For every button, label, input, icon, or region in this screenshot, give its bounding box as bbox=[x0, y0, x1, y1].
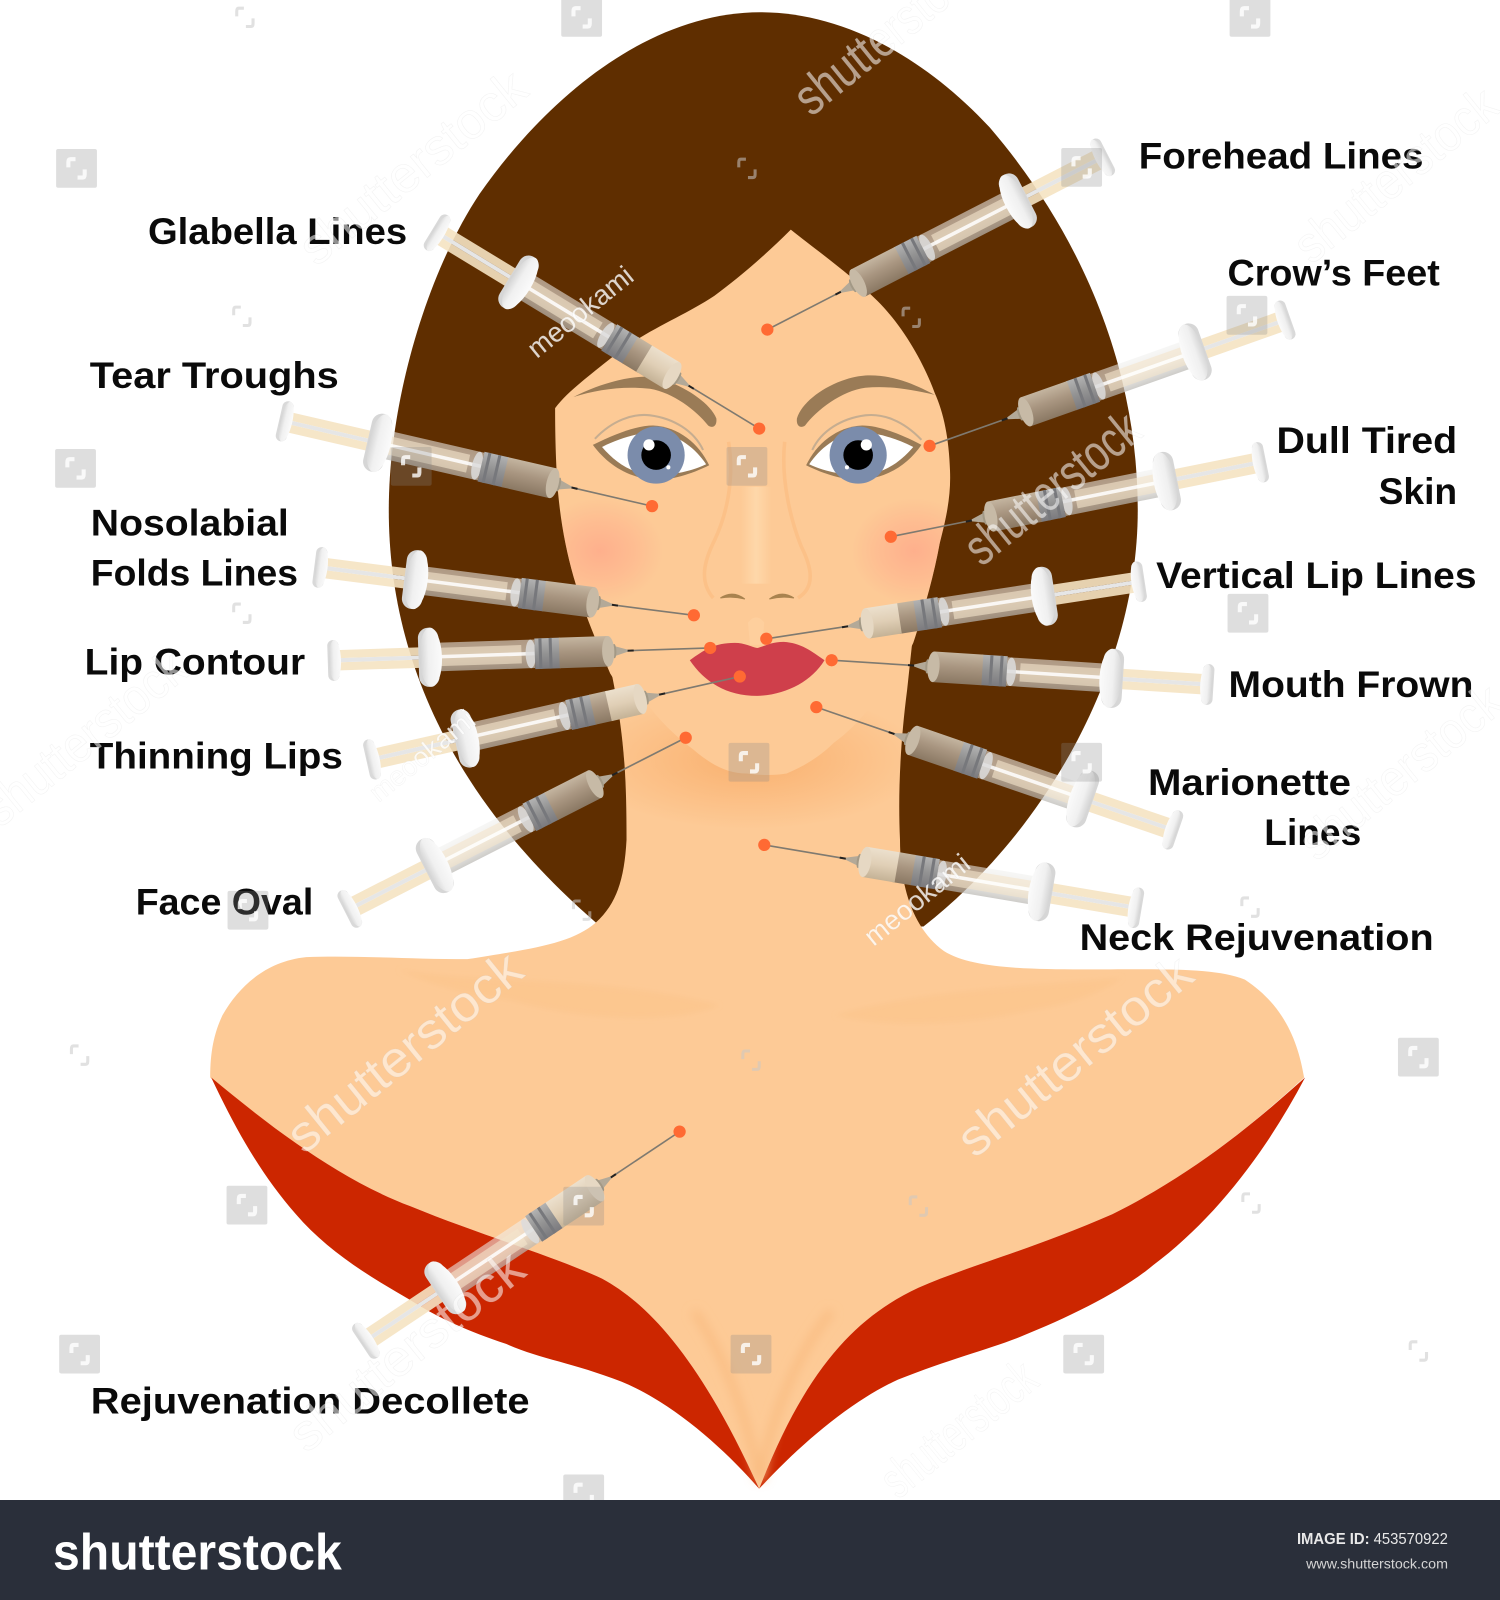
torso and neck skin bbox=[210, 633, 1304, 1489]
footer logo: shutterstock bbox=[53, 1523, 342, 1580]
watermark text: shutterstock bbox=[869, 1348, 1048, 1509]
label: forehead lines: Forehead Lines bbox=[1139, 135, 1423, 176]
label: thinning lips: Thinning Lips bbox=[90, 735, 343, 776]
label: rejuvenation decollete: Rejuvenation Decollete bbox=[91, 1380, 530, 1421]
watermark text: meookami bbox=[363, 704, 481, 808]
left eye bbox=[593, 415, 709, 484]
watermark text: shutterstock bbox=[275, 939, 533, 1164]
label: neck rejuvenation: Neck Rejuvenation bbox=[1080, 917, 1434, 958]
label: dull tired skin: Skin bbox=[1379, 471, 1457, 512]
syringe: glabella lines bbox=[417, 204, 775, 454]
syringe: vertical lip lines bbox=[762, 552, 1149, 668]
injection points bbox=[646, 323, 936, 1138]
syringe: marionette lines bbox=[807, 679, 1188, 860]
nose bbox=[704, 442, 810, 645]
left eyebrow bbox=[573, 377, 716, 427]
cleavage shading bbox=[694, 1311, 832, 1480]
label: dull tired skin: Dull Tired bbox=[1277, 420, 1457, 461]
label: nosolabial folds lines: Folds Lines bbox=[91, 553, 298, 594]
label: face oval: Face Oval bbox=[136, 881, 313, 922]
label: marionette lines: Lines bbox=[1264, 812, 1361, 853]
watermark text: shutterstock bbox=[287, 58, 538, 276]
neck shadow bbox=[622, 719, 888, 815]
syringe: neck rejuvenation bbox=[759, 816, 1147, 938]
collarbones bbox=[398, 969, 1122, 1024]
footer bar bbox=[0, 1500, 1500, 1600]
footer image id: IMAGE ID: 453570922 bbox=[1297, 1531, 1448, 1548]
label: nosolabial folds lines bbox=[91, 503, 298, 594]
label: lip contour: Lip Contour bbox=[85, 641, 305, 682]
label: tear troughs: Tear Troughs bbox=[90, 355, 339, 396]
label: mouth frown: Mouth Frown bbox=[1229, 664, 1473, 705]
syringe: crow's feet bbox=[920, 290, 1300, 474]
label: glabella lines: Glabella Lines bbox=[148, 211, 407, 252]
blush bbox=[562, 513, 945, 590]
label: crow's feet: Crow’s Feet bbox=[1228, 253, 1440, 294]
syringe: tear troughs bbox=[273, 391, 659, 535]
right eyebrow bbox=[797, 375, 935, 427]
footer url: www.shutterstock.com bbox=[1305, 1556, 1448, 1572]
watermark text: meookami bbox=[858, 848, 976, 952]
label: marionette lines bbox=[1148, 762, 1361, 853]
syringe: face oval bbox=[331, 711, 699, 938]
watermark text: meookami bbox=[521, 260, 639, 364]
syringe: thinning lips bbox=[360, 648, 746, 790]
syringe: rejuvenation decollete bbox=[345, 1107, 696, 1369]
syringe: dull tired skin bbox=[885, 432, 1272, 566]
label: marionette lines: Marionette bbox=[1148, 762, 1351, 803]
syringe: lip contour bbox=[327, 618, 711, 690]
watermark text: shutterstock bbox=[953, 400, 1151, 576]
label: dull tired skin bbox=[1277, 420, 1457, 512]
syringe: forehead lines bbox=[754, 128, 1121, 356]
watermark text: shutterstock bbox=[946, 943, 1204, 1168]
label: nosolabial folds lines: Nosolabial bbox=[91, 503, 289, 544]
face bbox=[555, 230, 950, 775]
label: vertical lip lines: Vertical Lip Lines bbox=[1156, 555, 1477, 596]
hair bbox=[389, 12, 1138, 927]
syringe: mouth frown bbox=[830, 631, 1215, 714]
syringe: nosolabial folds bbox=[311, 537, 698, 645]
red dress bbox=[211, 1078, 1305, 1489]
lips bbox=[690, 642, 824, 696]
right eye bbox=[806, 415, 921, 484]
watermark text: shutterstock bbox=[277, 1238, 535, 1463]
